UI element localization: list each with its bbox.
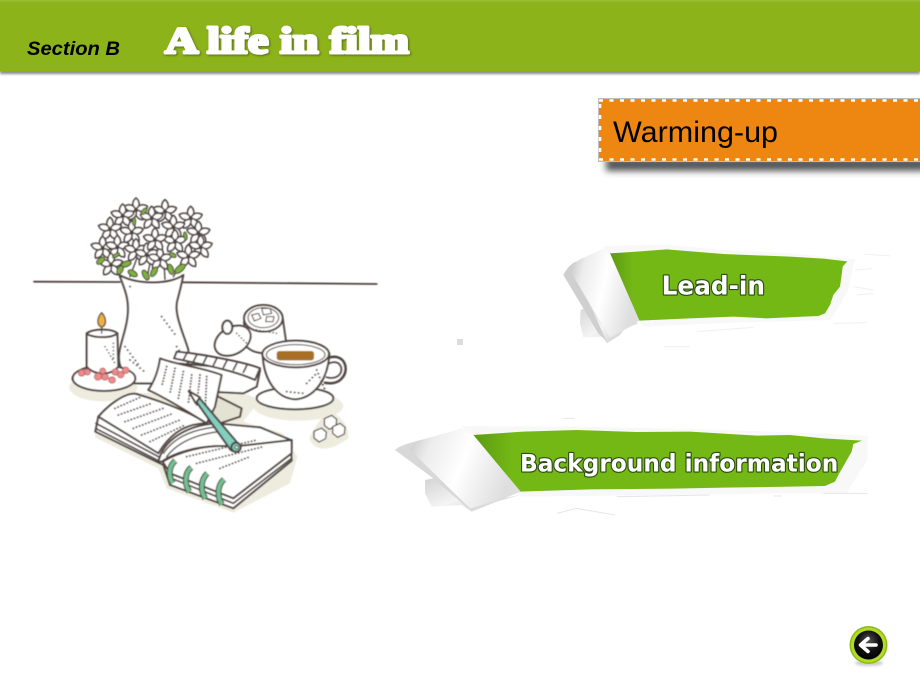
- section label: Section B: [27, 39, 120, 60]
- arrow icon: [860, 638, 876, 652]
- vase: [119, 275, 188, 383]
- closed book: [174, 352, 260, 423]
- pencil: [189, 391, 241, 452]
- shadow blobs: [69, 373, 348, 513]
- banner label: Warming-up: [613, 116, 778, 149]
- sugar cubes: [314, 415, 345, 442]
- paper curl: [563, 248, 639, 343]
- torn banner: background information: [395, 418, 868, 515]
- faint torn fragments: [557, 418, 868, 515]
- illustration: desk still life: [34, 198, 377, 513]
- title: A life in film: [165, 21, 409, 62]
- warming-up banner: [598, 98, 920, 171]
- green area: [610, 249, 847, 321]
- flower bouquet: [90, 198, 213, 281]
- faint torn fragments: [663, 254, 890, 347]
- torn banner: lead-in: [563, 245, 890, 347]
- sugar bowl and lid: [209, 305, 286, 362]
- green area: [473, 430, 862, 492]
- candle on saucer: [73, 313, 135, 391]
- open notebook: [95, 394, 292, 508]
- coffee cup: [257, 341, 346, 409]
- button label: Lead-in: [662, 271, 765, 301]
- horizontal table line: [34, 282, 377, 284]
- torn paper edge: [462, 426, 868, 497]
- back arrow button: [850, 626, 888, 666]
- notebook rings: [170, 461, 224, 504]
- torn paper edge: [603, 245, 855, 327]
- paper curl: [395, 428, 521, 512]
- button label: Background information: [520, 450, 838, 478]
- loose page: [148, 358, 222, 423]
- stray grey square: [457, 339, 463, 345]
- header bar: [0, 0, 920, 74]
